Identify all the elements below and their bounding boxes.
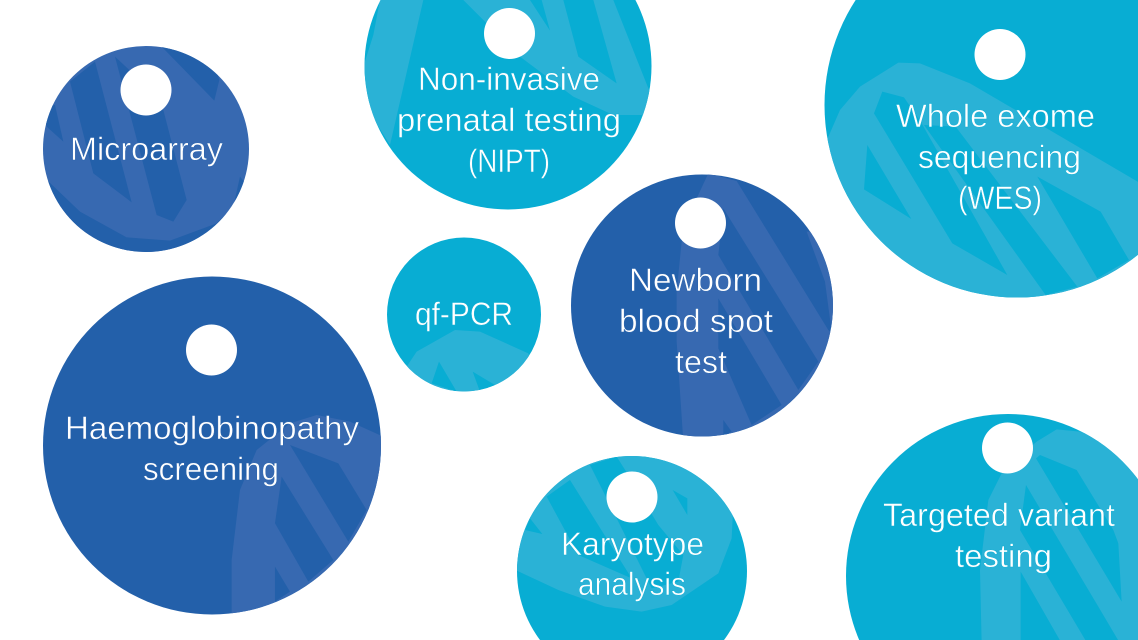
label: blood spot	[619, 303, 773, 339]
white dot	[186, 324, 237, 376]
disc with DNA pattern	[512, 448, 755, 640]
disc with DNA pattern	[387, 238, 541, 392]
label: test	[675, 344, 727, 380]
circle: Microarray	[43, 46, 249, 252]
label: sequencing	[918, 139, 1081, 175]
label: qf-PCR	[415, 296, 513, 332]
label	[397, 61, 621, 179]
circle: Non-invasive prenatal testing	[360, 0, 655, 215]
label: Targeted variant	[883, 497, 1115, 533]
label	[883, 497, 1115, 574]
disc with DNA pattern	[810, 0, 1138, 310]
label	[896, 98, 1095, 216]
disc with DNA pattern	[43, 46, 249, 252]
disc with DNA pattern	[840, 410, 1138, 640]
disc with DNA pattern	[360, 0, 655, 215]
label: Karyotype	[561, 526, 704, 562]
circle: Whole exome sequencing	[810, 0, 1138, 310]
white dot	[120, 64, 172, 116]
label	[65, 410, 360, 487]
label: analysis	[578, 566, 686, 602]
disc with DNA pattern	[40, 270, 385, 620]
label: screening	[143, 451, 279, 487]
label: Haemoglobinopathy	[65, 410, 360, 446]
white dot	[606, 472, 658, 522]
label: Whole exome	[896, 98, 1095, 134]
label: (WES)	[958, 180, 1042, 216]
circle: qf-PCR	[387, 238, 541, 392]
label	[561, 526, 704, 602]
circle: Haemoglobinopathy screening	[40, 270, 385, 620]
label: Microarray	[70, 131, 224, 167]
circle: Karyotype analysis	[512, 448, 755, 640]
white dot	[484, 8, 535, 59]
label	[619, 262, 773, 380]
white dot	[982, 422, 1033, 474]
label: Non-invasive	[418, 61, 600, 97]
circle: Targeted variant testing	[840, 410, 1138, 640]
label: (NIPT)	[468, 143, 550, 179]
white dot	[974, 29, 1026, 80]
white dot	[675, 198, 726, 248]
circle: Newborn blood spot test	[565, 170, 840, 442]
label: testing	[955, 538, 1052, 574]
disc with DNA pattern	[565, 170, 840, 442]
label: Newborn	[629, 262, 762, 298]
label: prenatal testing	[397, 102, 621, 138]
